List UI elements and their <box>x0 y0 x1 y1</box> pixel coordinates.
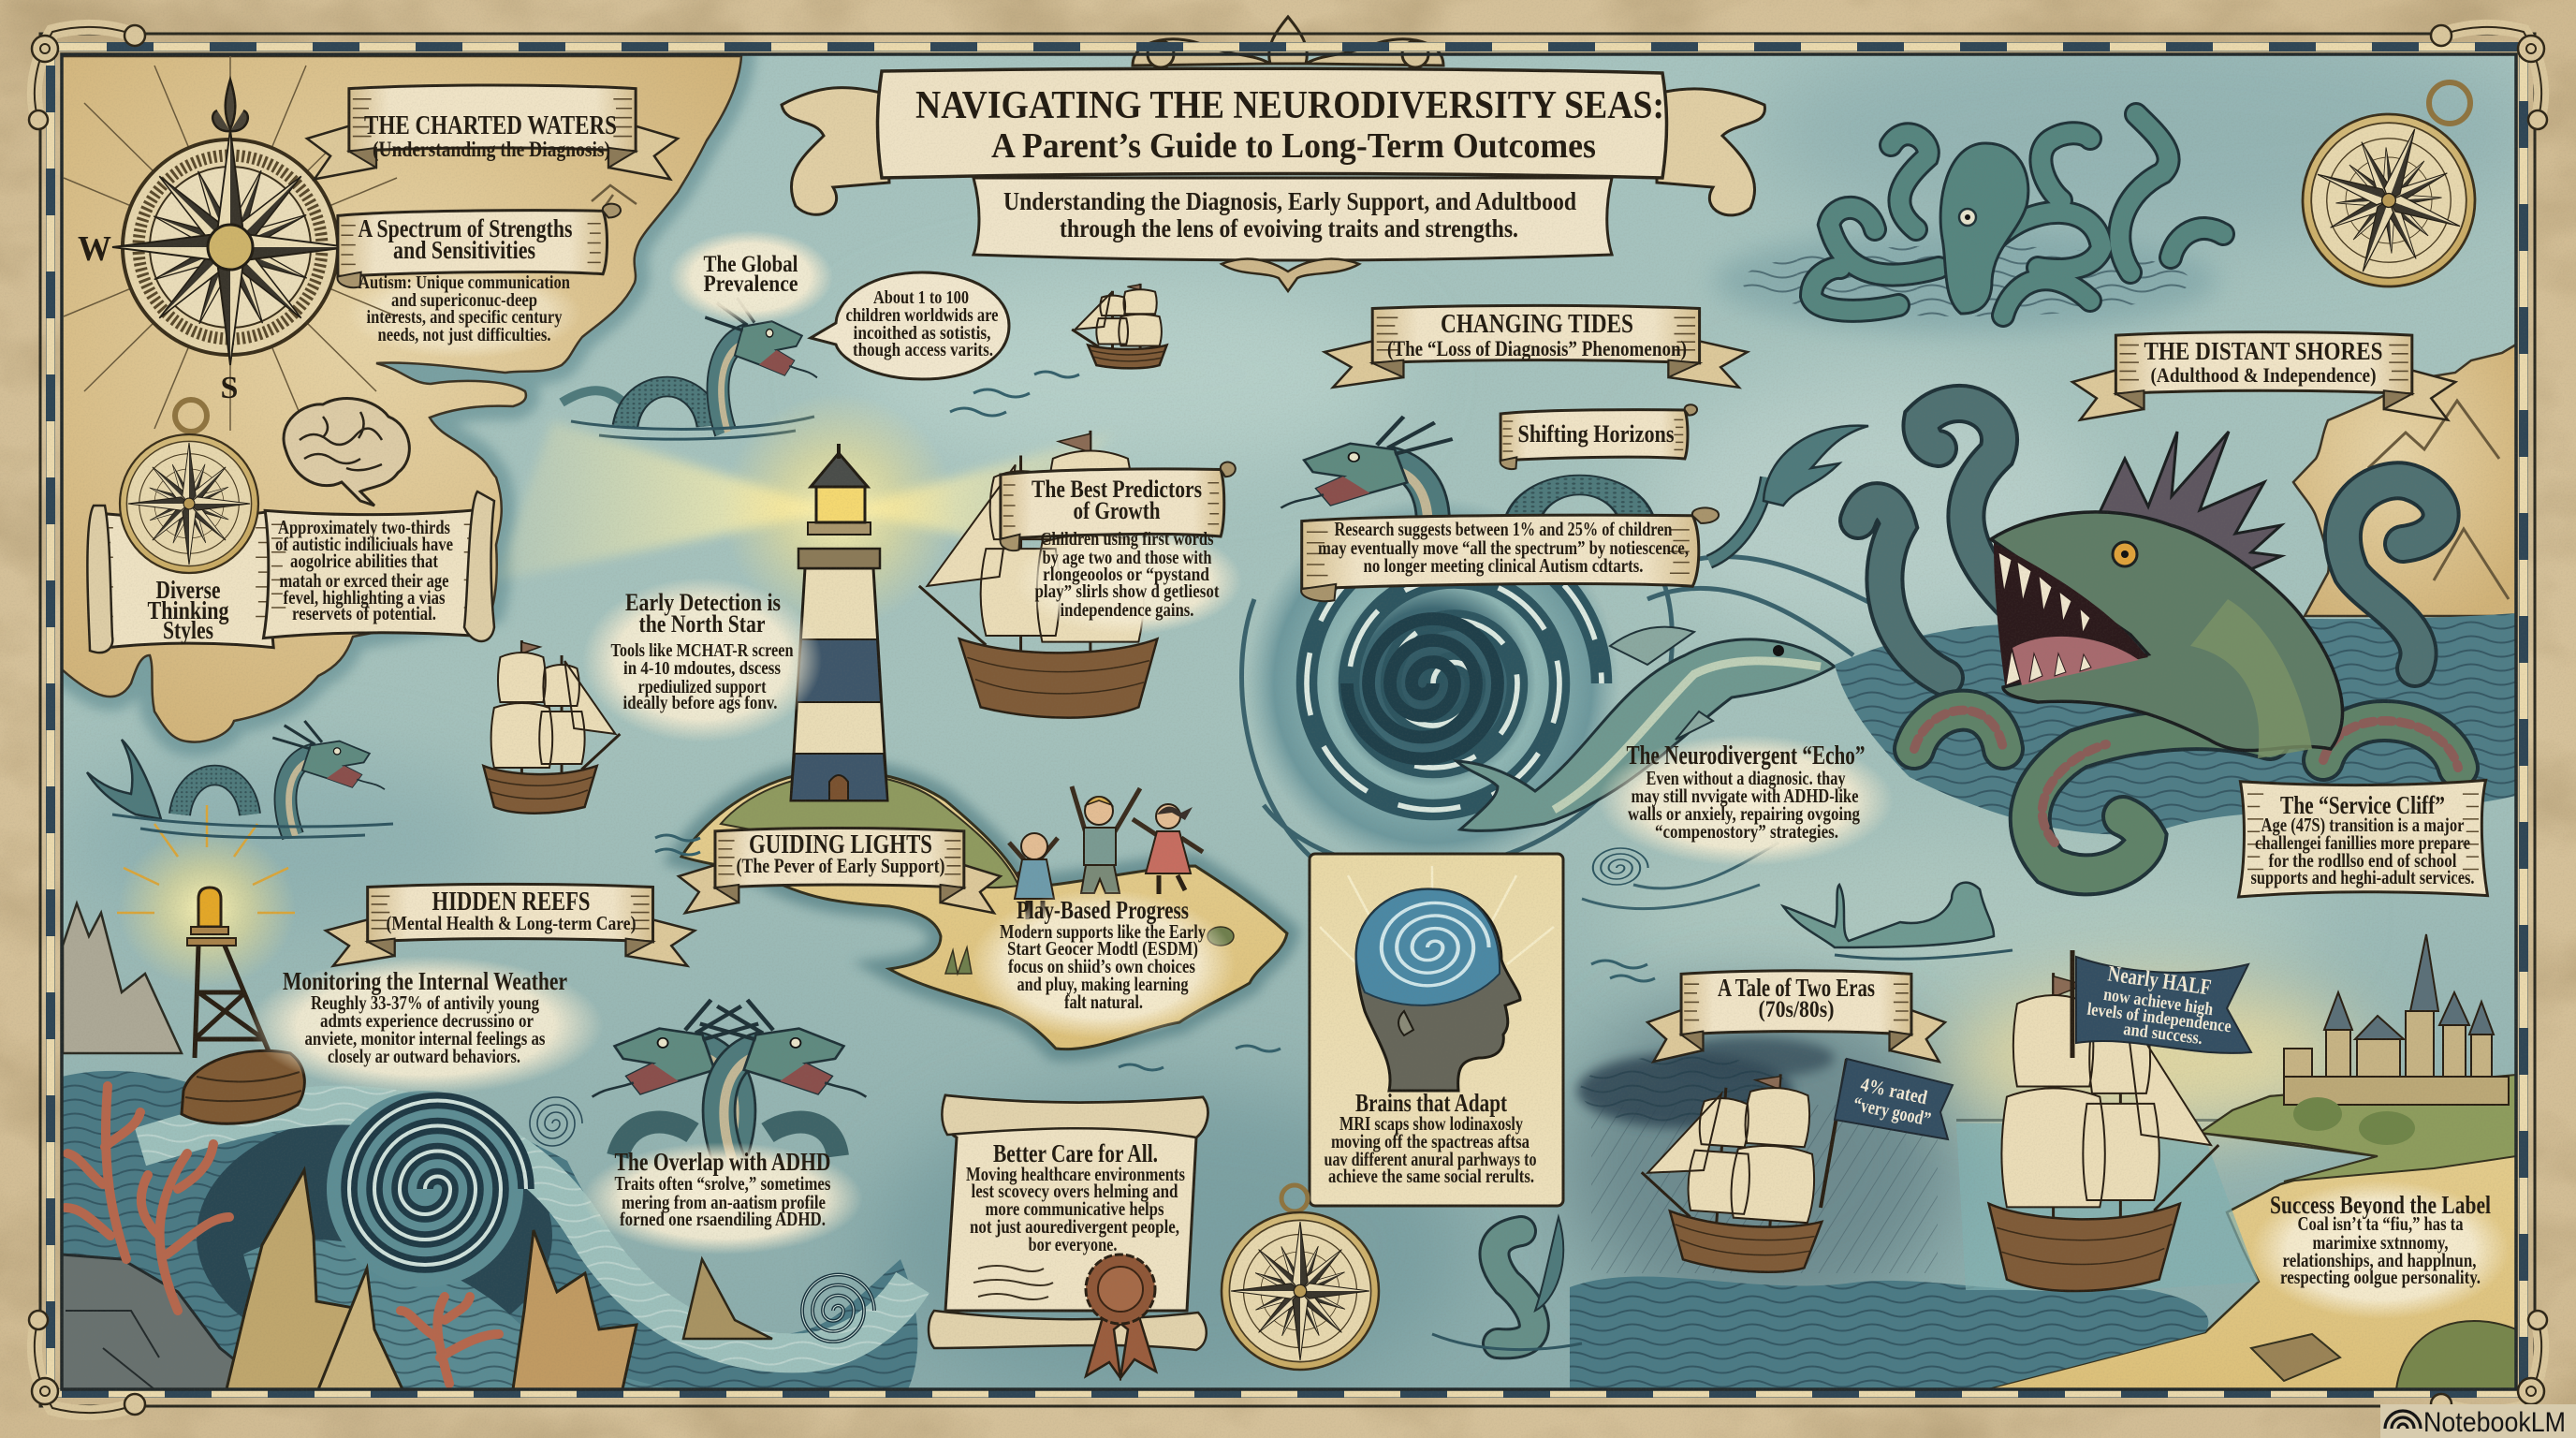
text: predictors: by age two and those with <box>1043 548 1211 568</box>
icon: buoy and rocks <box>63 805 304 1123</box>
heading ribbon: the distant shores <box>2072 332 2455 420</box>
flag: nearly half: Nearly HALF <box>2106 961 2213 1001</box>
speech bubble: prevalence: though access varits. <box>853 340 993 360</box>
heading ribbon: hidden reefs: (Mental Health & Long-term Care) <box>386 912 637 934</box>
heading ribbon: the charted waters: THE CHARTED WATERS <box>364 111 617 140</box>
storm cloud and rain <box>1563 997 1956 1325</box>
scroll: diverse thinking styles: Thinking <box>148 596 229 624</box>
card: brains that adapt: MRI scaps show lodinaxosly <box>1339 1112 1523 1135</box>
speech bubble: prevalence: incoithed as sotistis, <box>854 323 990 344</box>
banner: a spectrum of strengths <box>338 204 621 287</box>
scroll: diverse thinking styles <box>87 400 273 653</box>
compass letter W: W <box>78 229 111 269</box>
scroll: diverse thinking styles: Styles <box>163 616 213 644</box>
text: neurodivergent echo: may still nvvigate with ADHD-like <box>1631 785 1859 807</box>
sunset sky <box>1947 983 2359 1133</box>
land: charted waters <box>62 56 741 742</box>
text: play-based progress: Start Geocer Modtl (ESDM) <box>1007 937 1198 960</box>
card: brains that adapt: uav different anural parhways to <box>1324 1148 1537 1170</box>
text: predictors: play” slirls show d getliesot <box>1035 581 1220 602</box>
banner: research: no longer meeting clinical Autism cdtarts. <box>1363 554 1644 577</box>
text: play-based progress: Play-Based Progress <box>1017 896 1189 924</box>
scroll: the service cliff: supports and heghi-adult services. <box>2250 866 2475 888</box>
bottom-right waters <box>1570 1123 2259 1389</box>
main title banner: A Parent’s Guide to Long-Term Outcomes <box>991 126 1596 166</box>
flag: nearly half: now achieve high <box>2102 985 2215 1020</box>
text glows <box>248 230 2510 1319</box>
compass: top right <box>2278 82 2499 311</box>
title plate <box>878 68 1666 178</box>
scroll: better care for all: Moving healthcare environments <box>966 1163 1185 1185</box>
text: neurodivergent echo: Even without a diagnosic. thay <box>1646 767 1846 789</box>
flag: 4 percent rated very good: “very good” <box>1852 1093 1933 1131</box>
text: autism definition: Autism: Unique communication <box>359 272 570 293</box>
scroll: the service cliff: for the rodllso end of school <box>2269 849 2457 872</box>
card: brains that adapt: achieve the same social rerults. <box>1328 1165 1534 1187</box>
card: brains that adapt: Brains that Adapt <box>1355 1089 1507 1117</box>
text: autism definition: and supericonuc-deep <box>391 290 537 311</box>
text: play-based progress: and pluy, making learning <box>1017 973 1189 995</box>
banner: the best predictors: of Growth <box>1073 497 1161 524</box>
text: play-based progress: Modern supports like the Early <box>1000 920 1206 943</box>
text: success beyond the label: Coal isn’t ta “fiu,” has ta <box>2297 1212 2464 1235</box>
speech bubble: prevalence: About 1 to 100 <box>873 287 969 308</box>
text: predictors: Children using first words <box>1041 529 1214 550</box>
left tail <box>782 88 889 214</box>
heading ribbon: guiding lights: GUIDING LIGHTS <box>749 830 932 859</box>
text: predictors <box>1035 529 1220 621</box>
scroll: better care for all: lest scovecy overs helming and <box>972 1180 1178 1202</box>
text: autism definition: needs, not just difficulties. <box>378 325 550 345</box>
ornament: lower <box>1222 259 1359 291</box>
heading ribbon: changing tides: CHANGING TIDES <box>1441 310 1633 339</box>
small wave marks <box>655 372 1655 1070</box>
scroll: better care for all: Better Care for All. <box>993 1139 1158 1167</box>
sea serpent: global prevalence <box>562 298 817 439</box>
heading ribbon: a tale of two eras: A Tale of Two Eras <box>1718 974 1875 1002</box>
main title banner: NAVIGATING THE NEURODIVERSITY SEAS: <box>915 84 1664 127</box>
text: neurodivergent echo: walls or anxiely, repairing ovgoing <box>1628 802 1860 825</box>
heading ribbon: the charted waters: (Understanding the Diagnosis) <box>373 138 610 161</box>
subtitle plate <box>973 178 1612 260</box>
text: neurodivergent echo: The Neurodivergent “Echo” <box>1627 741 1865 770</box>
lower sea serpent <box>1432 1217 1582 1350</box>
heading ribbon: guiding lights <box>679 828 1001 913</box>
scroll: two-thirds cognitive abilities: aogolrice abilities that <box>290 550 438 572</box>
banner: the best predictors <box>1001 462 1236 550</box>
scroll: two-thirds cognitive abilities: fevel, highlighting a vias <box>283 586 446 609</box>
text: early detection: the North Star <box>638 610 766 638</box>
land: distant shores <box>2293 345 2516 616</box>
heading ribbon: hidden reefs <box>326 884 695 966</box>
text: monitoring the internal weather: admts experience decrussino or <box>320 1009 534 1032</box>
text: play-based progress: falt natural. <box>1064 990 1143 1013</box>
banner: a spectrum of strengths: A Spectrum of Strengths <box>358 214 573 242</box>
banner: research <box>1301 507 1719 601</box>
text: success beyond the label: marimixe sxtnnomy, <box>2312 1231 2449 1254</box>
icon: wax seal <box>1086 1255 1156 1378</box>
main title banner <box>782 17 1764 291</box>
head profile <box>1356 889 1520 1091</box>
text: play-based progress <box>1000 896 1206 1013</box>
banner: research: may eventually move “all the spectrum” by notiescence, <box>1318 536 1689 559</box>
heading ribbon: a tale of two eras <box>1647 971 1945 1062</box>
whirlpool <box>1241 496 1900 909</box>
text: early detection: Early Detection is <box>625 589 781 616</box>
scroll: the service cliff: The “Service Cliff” <box>2280 791 2445 819</box>
right tail <box>1657 89 1764 215</box>
sea serpent: left <box>87 721 393 838</box>
text: monitoring the internal weather: anviete, monitor internal feelings as <box>305 1027 545 1049</box>
text: the overlap with adhd: forned one rsaendiling ADHD. <box>620 1208 826 1230</box>
text: success beyond the label: Success Beyond the Label <box>2270 1191 2491 1219</box>
text: monitoring the internal weather: Reughly 33-37% of antivily young <box>311 991 539 1014</box>
small compass <box>120 400 258 573</box>
twin-headed hydra <box>593 1000 866 1163</box>
text: early detection: Tools like MCHAT-R screen <box>610 640 794 661</box>
speech bubble: prevalence <box>811 272 1009 379</box>
text: the global prevalence: Prevalence <box>704 271 798 297</box>
scroll: better care for all: bor everyone. <box>1028 1233 1118 1255</box>
compass: charted waters <box>64 56 397 431</box>
text: autism definition <box>359 272 570 345</box>
text: the overlap with adhd: The Overlap with ADHD <box>614 1148 831 1176</box>
scroll: better care for all: not just aouredivergent people, <box>970 1215 1179 1238</box>
compass letter S: S <box>221 371 238 405</box>
heading ribbon: the distant shores: THE DISTANT SHORES <box>2144 337 2383 365</box>
scroll: two-thirds cognitive abilities: matah or exrced their age <box>279 569 449 592</box>
text: monitoring the internal weather: closely ar outward behaviors. <box>328 1045 520 1067</box>
heading ribbon: hidden reefs: HIDDEN REEFS <box>432 888 590 917</box>
text: predictors: independence gains. <box>1060 600 1194 621</box>
text: the overlap with adhd <box>614 1148 831 1230</box>
text: monitoring the internal weather: Monitoring the Internal Weather <box>283 967 567 995</box>
compass: bottom centre <box>1222 1185 1379 1370</box>
scroll: the service cliff: Age (47S) transition is a major <box>2261 814 2464 836</box>
monster waves <box>1835 613 2516 835</box>
banner: a spectrum of strengths: and Sensitivities <box>393 236 535 264</box>
banner: the best predictors: The Best Predictors <box>1032 476 1202 503</box>
main title banner: Understanding the Diagnosis, Early Support, and Adultbood <box>1003 187 1576 215</box>
text: early detection: in 4-10 mdoutes, dscess <box>623 658 781 679</box>
heading ribbon: the distant shores: (Adulthood & Independence) <box>2151 363 2376 387</box>
text: the overlap with adhd: mering from an-aatism profile <box>622 1191 826 1213</box>
text: the global prevalence <box>704 252 798 297</box>
text: neurodivergent echo: “compenostory” strategies. <box>1655 820 1838 843</box>
speech bubble: prevalence: children worldwids are <box>846 305 999 326</box>
distant-shore land and castle <box>1984 934 2516 1389</box>
flag: 4 percent rated very good: 4% rated <box>1859 1073 1929 1108</box>
sea serpent: top centre <box>1281 417 1868 570</box>
heading ribbon: changing tides <box>1325 305 1748 388</box>
mermaid <box>1783 883 2012 959</box>
banner: shifting horizons: Shifting Horizons <box>1518 420 1674 448</box>
icon: brain <box>284 399 409 506</box>
text: success beyond the label <box>2270 1191 2491 1288</box>
text: neurodivergent echo <box>1627 741 1865 843</box>
icon: reefs and corals <box>62 1086 772 1389</box>
ships at tale of two eras <box>1635 973 2218 1291</box>
scroll: better care for all: more communicative helps <box>985 1197 1164 1220</box>
text: play-based progress: focus on shiid’s own choices <box>1008 955 1195 977</box>
heading ribbon: a tale of two eras: (70s/80s) <box>1758 997 1835 1022</box>
scroll: the service cliff <box>2239 780 2488 897</box>
scroll: diverse thinking styles: Diverse <box>155 576 221 604</box>
text: the overlap with adhd: Traits often “srolve,” sometimes <box>614 1172 831 1195</box>
text: early detection: ideally before ags fonv. <box>623 693 777 713</box>
bottom-left deep water <box>62 1071 917 1389</box>
flag: nearly half: levels of independence <box>2086 1000 2232 1036</box>
text: success beyond the label: respecting oolgue personality. <box>2280 1266 2481 1288</box>
lighthouse island <box>681 770 1287 1049</box>
scroll: the service cliff: challengei fanillies more prepare <box>2255 831 2470 854</box>
flag: nearly half: and success. <box>2122 1020 2203 1049</box>
main title banner: through the lens of evoiving traits and strengths. <box>1060 214 1518 242</box>
heading ribbon: changing tides: (The “Loss of Diagnosis” Phenomenon) <box>1387 337 1687 360</box>
text: monitoring the internal weather <box>283 967 567 1067</box>
ornament: crown <box>1133 17 1443 67</box>
great sea monster <box>1835 404 2516 874</box>
banner: shifting horizons <box>1500 404 1697 469</box>
lighthouse <box>791 444 887 800</box>
flag: 4 percent rated very good <box>1821 1059 1953 1208</box>
ships <box>483 284 1167 814</box>
card: brains that adapt: moving off the spactreas aftsa <box>1331 1130 1530 1152</box>
card: brains that adapt <box>1310 854 1563 1206</box>
kraken octopus <box>1713 114 2223 332</box>
light beams <box>496 393 1114 627</box>
scroll: better care for all <box>929 1095 1208 1378</box>
text: the global prevalence: The Global <box>704 252 798 277</box>
text: autism definition: interests, and specific century <box>367 307 562 328</box>
flag: nearly half <box>2072 950 2251 1058</box>
banner: research: Research suggests between 1% and 25% of children <box>1335 518 1673 540</box>
scroll: two-thirds cognitive abilities <box>264 492 494 641</box>
text: success beyond the label: relationships, and happlnun, <box>2282 1249 2477 1271</box>
dolphin fish <box>1456 627 1835 830</box>
scroll: two-thirds cognitive abilities: Approximately two-thirds <box>278 516 450 538</box>
children playing <box>1009 786 1203 919</box>
text: early detection: rpediulized support <box>638 677 767 697</box>
scroll: two-thirds cognitive abilities: reservets of potential. <box>292 602 436 624</box>
heading ribbon: guiding lights: (The Pever of Early Support) <box>736 854 945 877</box>
scroll: two-thirds cognitive abilities: of autistic indiliciuals have <box>275 533 453 555</box>
text: predictors: rlongeoolos or “pystand <box>1043 565 1209 585</box>
text: early detection <box>610 589 794 713</box>
heading ribbon: the charted waters <box>307 85 678 179</box>
